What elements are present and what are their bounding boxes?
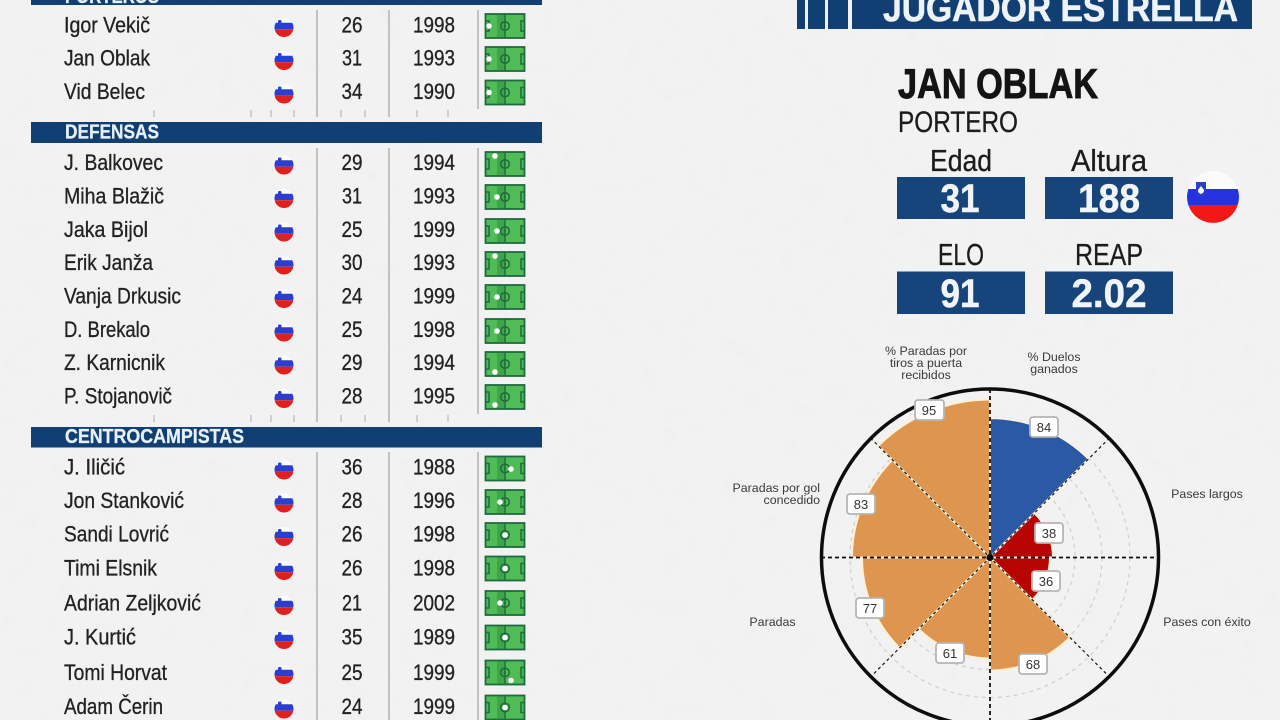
value label 61: 61 [943, 646, 957, 661]
row: Timi Elsnik: Timi Elsnik [64, 556, 158, 580]
heading: centrocampistas: CENTROCAMPISTAS [65, 426, 244, 448]
row: Miha Blažič: 1993 [413, 184, 455, 208]
axis label: % paradas por tiros a puerta recibidos: % Paradas por [885, 344, 967, 358]
wedge: 61 [919, 558, 990, 658]
row: Tomi Horvat: 25 [342, 660, 362, 685]
row: Sandi Lovrić: Sandi Lovrić [64, 522, 169, 546]
row: Erik Janža: 30 [342, 250, 362, 275]
row: Z. Karnicnik: 1994 [413, 350, 455, 375]
row: Tomi Horvat: Tomi Horvat [64, 660, 167, 685]
value label 84: 84 [1037, 420, 1051, 435]
icon: slovenia flag [1187, 171, 1239, 223]
row: D. Brekalo [64, 317, 524, 343]
stat: reap: 2.02 [1072, 272, 1146, 316]
stat: elo [897, 237, 1025, 316]
axis label: pases con exito: Pases con éxito [1163, 615, 1251, 629]
value label 83 [847, 494, 875, 514]
stat: elo: 91 [940, 272, 980, 316]
row: Z. Karnicnik: Z. Karnicnik [64, 350, 166, 375]
row: J. Kurtić: 1989 [413, 624, 455, 650]
value label 68: 68 [1026, 657, 1040, 672]
axis label: % paradas por tiros a puerta recibidos: tiros a puerta [890, 356, 962, 370]
wedge: 68 [990, 558, 1070, 670]
row: Igor Vekič: 1998 [413, 12, 455, 38]
row: Adrian Zeljković: 21 [342, 590, 362, 616]
row: Igor Vekič: 26 [342, 12, 362, 38]
axis label: % duelos ganados: % Duelos [1027, 350, 1081, 364]
wedge: paradas por gol concedido 83 [852, 460, 990, 558]
row: J. Balkovec [64, 150, 524, 176]
stat: edad: Edad [930, 143, 992, 178]
row: Z. Karnicnik [64, 350, 524, 376]
wedge: % paradas por tiros 95 [878, 400, 990, 558]
value label 83: 83 [854, 497, 868, 512]
row: J. Kurtić [64, 624, 524, 650]
row: Jon Stanković: 1996 [413, 488, 455, 513]
row: Jaka Bijol: 1999 [413, 217, 455, 242]
row: J. Iličić [64, 454, 524, 480]
row: Jan Oblak: Jan Oblak [64, 46, 151, 70]
row: Vanja Drkusic [64, 284, 524, 309]
value label 77 [856, 598, 884, 618]
value label 77: 77 [863, 601, 877, 616]
row: Timi Elsnik: 26 [342, 556, 362, 580]
row: Jon Stanković [64, 488, 524, 514]
stat: edad [897, 143, 1025, 221]
wedge: pases con exito 36 [990, 558, 1050, 600]
axis label: % paradas por tiros a puerta recibidos: recibidos [901, 368, 951, 382]
row: Miha Blažič: Miha Blažič [64, 184, 164, 208]
value label 68 [1019, 654, 1047, 674]
row: Vid Belec: 34 [342, 79, 362, 104]
row: Erik Janža: 1993 [413, 250, 455, 275]
row: Igor Vekič: Igor Vekič [64, 12, 150, 38]
row: Jan Oblak: 1993 [413, 46, 455, 70]
row: J. Kurtić: J. Kurtić [64, 624, 136, 650]
stat: altura: Altura [1071, 143, 1148, 178]
row: Jon Stanković: Jon Stanković [64, 488, 184, 513]
row: Vid Belec: 1990 [413, 79, 455, 104]
row: J. Kurtić: 35 [342, 624, 362, 650]
row: J. Iličić: J. Iličić [64, 454, 125, 480]
row: Miha Blažič: 31 [342, 184, 362, 208]
player position: PORTERO [898, 106, 1018, 139]
row: D. Brekalo: 1998 [413, 317, 455, 342]
row: Z. Karnicnik: 29 [342, 350, 362, 375]
row: Erik Janža [64, 250, 524, 276]
panel: squad table [31, 0, 542, 720]
value label 36 [1032, 571, 1060, 591]
row: P. Stojanovič: 1995 [413, 384, 455, 408]
axis label: % duelos ganados: ganados [1030, 362, 1078, 376]
row: Igor Vekič [64, 12, 524, 38]
row: Timi Elsnik: 1998 [413, 556, 455, 580]
row: P. Stojanovič [64, 384, 524, 409]
row: Sandi Lovrić [64, 522, 524, 547]
row: Adrian Zeljković [64, 590, 524, 616]
value label 84 [1030, 417, 1058, 437]
row: Sandi Lovrić: 26 [342, 522, 362, 546]
wedge: paradas 77 [862, 558, 990, 648]
row: Jaka Bijol: 25 [342, 217, 362, 242]
stat: reap: REAP [1075, 237, 1143, 272]
heading: porteros [31, 0, 542, 8]
row: Vid Belec: Vid Belec [64, 79, 145, 104]
row: Erik Janža: Erik Janža [64, 250, 154, 275]
player name: JAN OBLAK [898, 60, 1098, 107]
row: Sandi Lovrić: 1998 [413, 522, 455, 546]
stat: reap [1045, 237, 1173, 316]
row: J. Balkovec: J. Balkovec [64, 150, 163, 175]
row: Jan Oblak [64, 46, 524, 71]
stat: altura [1045, 143, 1173, 221]
value label 38: 38 [1042, 526, 1056, 541]
heading: defensas [31, 122, 542, 144]
wedge: pases largos 38 [990, 513, 1053, 558]
row: J. Balkovec: 29 [342, 150, 362, 175]
stat: edad: 31 [940, 177, 980, 221]
axis label: paradas por gol concedido: Paradas por gol [733, 481, 820, 495]
row: J. Iličić: 1988 [413, 454, 455, 480]
heading: centrocampistas [31, 426, 542, 448]
row: Adam Čerin [64, 694, 524, 720]
row: Vid Belec [64, 79, 524, 104]
row: P. Stojanovič: 28 [342, 384, 362, 408]
value label 38 [1035, 523, 1063, 543]
row: Adam Čerin: 24 [342, 694, 362, 719]
row: Vanja Drkusic: 1999 [413, 284, 455, 308]
stat: altura: 188 [1078, 177, 1140, 221]
row: Adrian Zeljković: Adrian Zeljković [64, 590, 201, 616]
value label 95 [915, 400, 944, 420]
row: J. Balkovec: 1994 [413, 150, 455, 175]
axis label: paradas por gol concedido: concedido [764, 493, 820, 507]
stat: elo: ELO [938, 237, 984, 272]
row: Vanja Drkusic: 24 [342, 284, 362, 308]
row: Vanja Drkusic: Vanja Drkusic [64, 284, 181, 308]
row: J. Iličić: 36 [342, 454, 362, 480]
row: Timi Elsnik [64, 556, 524, 580]
row: Adrian Zeljković: 2002 [413, 590, 455, 616]
row: Jaka Bijol: Jaka Bijol [64, 217, 148, 242]
heading: defensas: DEFENSAS [65, 122, 159, 144]
row: D. Brekalo: D. Brekalo [64, 317, 150, 342]
axis label: pases largos: Pases largos [1171, 487, 1243, 501]
row: D. Brekalo: 25 [342, 317, 362, 342]
row: Miha Blažič [64, 184, 524, 209]
value label 95: 95 [922, 403, 936, 418]
row: P. Stojanovič: P. Stojanovič [64, 384, 172, 408]
polar chart [821, 389, 1159, 720]
row: Tomi Horvat: 1999 [413, 660, 455, 685]
row: Tomi Horvat [64, 660, 524, 685]
axis label: paradas: Paradas [749, 615, 796, 629]
row: Adam Čerin: Adam Čerin [64, 694, 163, 719]
wedge: % duelos ganados 84 [990, 418, 1089, 558]
value label 36: 36 [1039, 574, 1053, 589]
row: Adam Čerin: 1999 [413, 694, 455, 719]
row: Jon Stanković: 28 [342, 488, 362, 513]
value label 61 [936, 643, 964, 663]
row: Jaka Bijol [64, 217, 524, 243]
row: Jan Oblak: 31 [342, 46, 362, 70]
